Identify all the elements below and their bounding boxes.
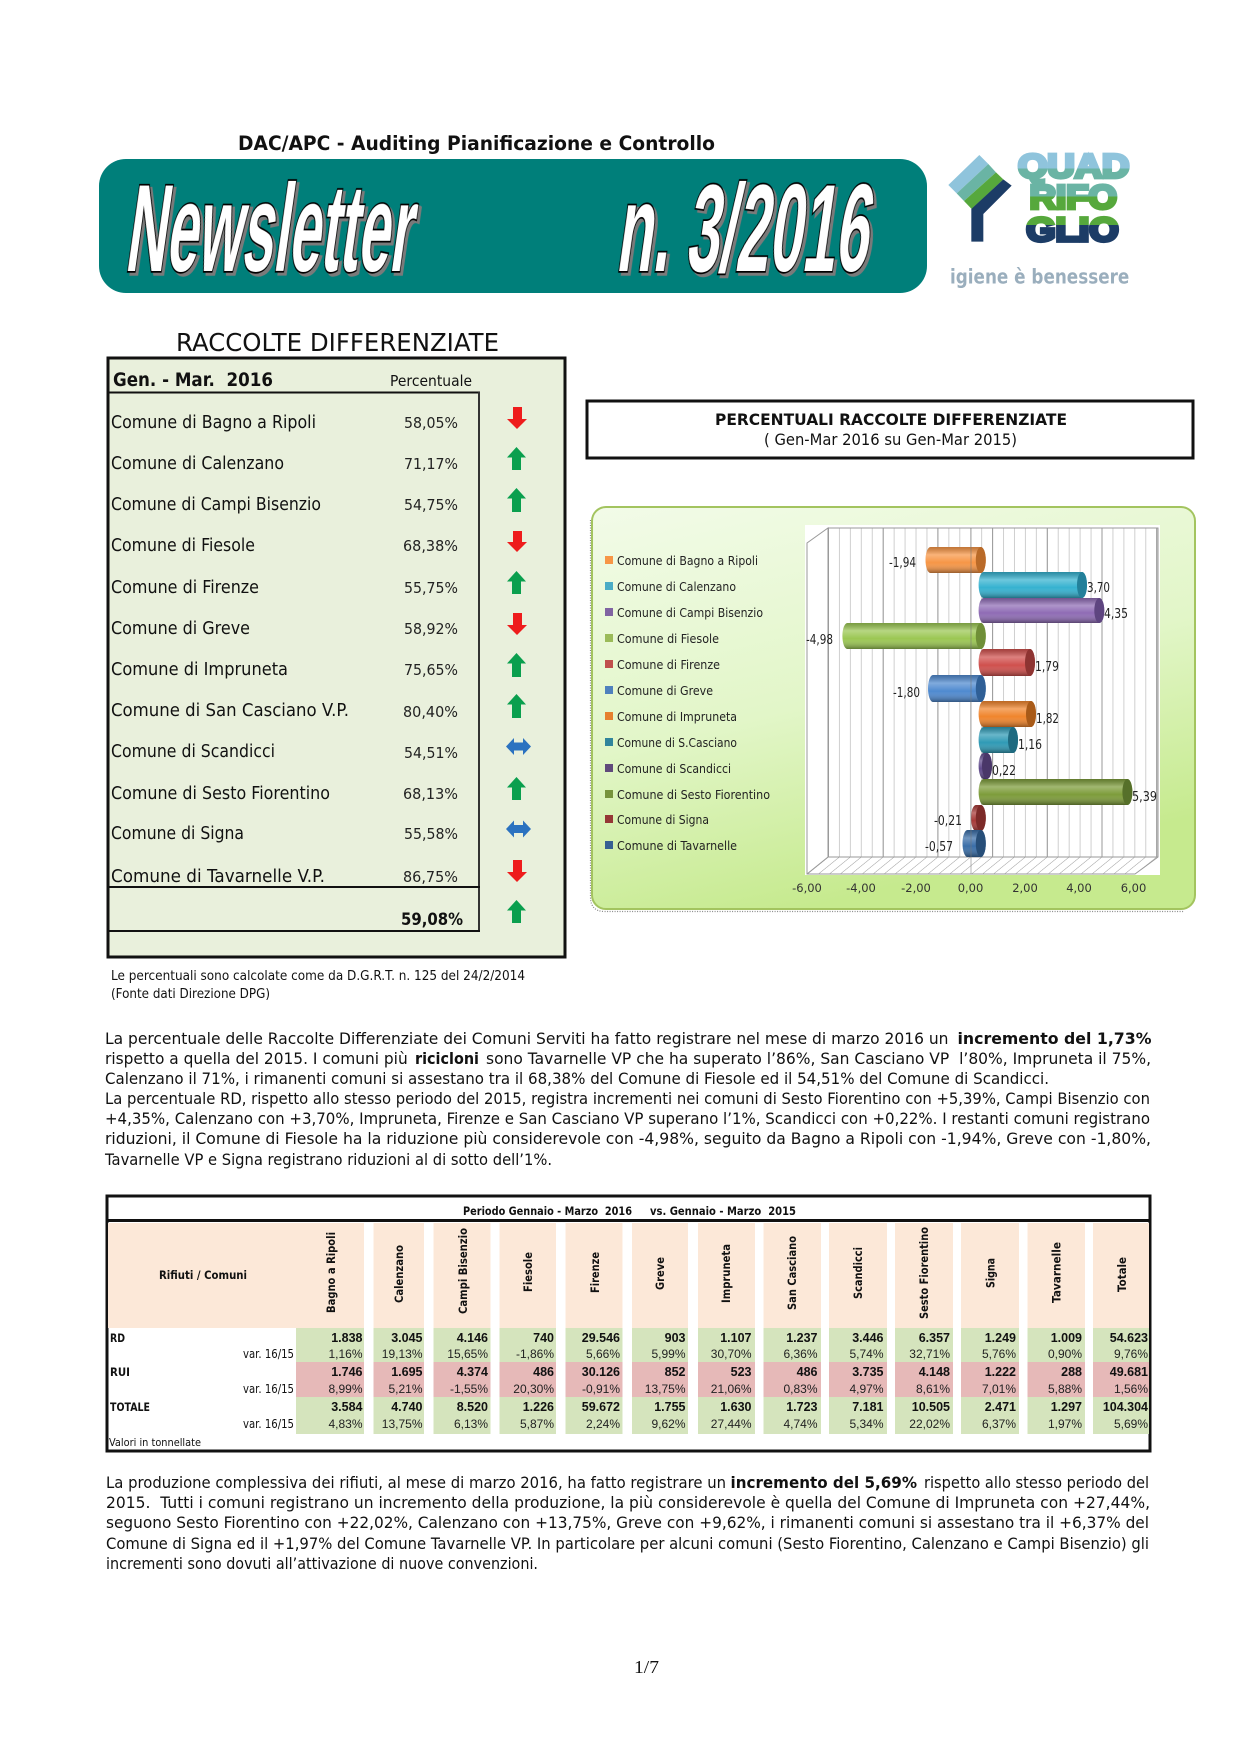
data labels: -1,80 bbox=[893, 686, 920, 701]
column values: Greve: 13,75% bbox=[645, 1382, 686, 1396]
column values: Fiesole: 1.226 bbox=[523, 1400, 554, 1414]
column values: Scandicci: 3.446 bbox=[852, 1331, 884, 1345]
rows: comuni: Comune di Bagno a Ripoli bbox=[111, 413, 316, 433]
column values: Totale: 5,69% bbox=[1114, 1417, 1148, 1431]
icon: trend arrows bbox=[506, 407, 531, 923]
legend: Comune di Calenzano bbox=[617, 580, 736, 594]
column values: Signa: 1.222 bbox=[985, 1365, 1016, 1379]
text block: waste production commentary: La produzione complessiva dei rifiuti, al mese di marzo 2016, ha fatto registrare un bbox=[106, 1473, 726, 1492]
column values: Scandicci bbox=[849, 1331, 884, 1431]
column values: Greve bbox=[645, 1331, 686, 1431]
column values: Impruneta bbox=[711, 1331, 752, 1431]
text block: raccolte differenziate commentary: La percentuale delle Raccolte Differenziate dei Comuni Serviti ha fatto registrare nel mese di marzo 2016 un bbox=[105, 1029, 948, 1048]
rows: comuni bbox=[111, 413, 349, 887]
legend: Comune di S.Casciano bbox=[617, 736, 737, 750]
footnote: (Fonte dati Direzione DPG) bbox=[111, 986, 270, 1002]
column values: Signa bbox=[982, 1331, 1016, 1431]
column values: Scandicci: 5,74% bbox=[849, 1347, 884, 1361]
column values: Bagno a Ripoli: 1,16% bbox=[328, 1347, 363, 1361]
column values: Firenze: 2,24% bbox=[586, 1417, 620, 1431]
rows: percentages bbox=[401, 414, 463, 929]
x axis labels: 4,00 bbox=[1066, 881, 1092, 895]
column values: Sesto Fiorentino bbox=[909, 1331, 950, 1431]
chart plot background bbox=[805, 525, 1160, 875]
column values: Tavarnelle: 1.297 bbox=[1051, 1400, 1082, 1414]
table header labels bbox=[159, 1227, 1129, 1319]
rows: percentages: 86,75% bbox=[403, 868, 458, 886]
legend: Comune di Bagno a Ripoli bbox=[617, 554, 758, 568]
rows: percentages: 58,05% bbox=[404, 414, 458, 432]
table header labels: Tavarnelle bbox=[1050, 1242, 1064, 1303]
rows: comuni: Comune di Tavarnelle V.P. bbox=[111, 867, 325, 887]
text block: raccolte differenziate commentary: Tavarnelle VP e Signa registrano riduzioni al di sotto dell’1%. bbox=[104, 1150, 552, 1169]
table header labels: Calenzano bbox=[392, 1245, 406, 1303]
column values: Bagno a Ripoli: 8,99% bbox=[328, 1382, 363, 1396]
table header labels: Fiesole bbox=[521, 1252, 535, 1292]
table header labels: San Casciano bbox=[785, 1236, 799, 1310]
column values: Totale: 54.623 bbox=[1110, 1331, 1148, 1345]
table header labels: Sesto Fiorentino bbox=[917, 1227, 931, 1319]
rows: percentages: 55,75% bbox=[404, 579, 458, 597]
column values: Fiesole: 486 bbox=[533, 1365, 554, 1379]
rows: percentages: 54,75% bbox=[404, 496, 458, 514]
rows: comuni: Comune di Fiesole bbox=[111, 536, 255, 556]
column values: San Casciano: 0,83% bbox=[783, 1382, 818, 1396]
column values: Fiesole: 20,30% bbox=[513, 1382, 554, 1396]
column values: Signa: 2.471 bbox=[985, 1400, 1016, 1414]
column values: Totale: 1,56% bbox=[1114, 1382, 1148, 1396]
column values: Tavarnelle bbox=[1048, 1331, 1082, 1431]
column values: Signa: 5,76% bbox=[982, 1347, 1016, 1361]
rows: comuni: Comune di Sesto Fiorentino bbox=[111, 784, 330, 804]
column values: Tavarnelle: 0,90% bbox=[1048, 1347, 1082, 1361]
table column backgrounds bbox=[108, 1223, 1149, 1434]
department heading: DAC/APC - Auditing Pianificazione e Controllo bbox=[238, 132, 715, 155]
column values: Greve: 9,62% bbox=[651, 1417, 686, 1431]
table header labels: Totale bbox=[1115, 1257, 1129, 1292]
column values: San Casciano bbox=[783, 1331, 818, 1431]
panel: percentage table by comune bbox=[107, 358, 565, 957]
column values: Sesto Fiorentino: 4.148 bbox=[919, 1365, 950, 1379]
column values: Campi Bisenzio: 4.374 bbox=[457, 1365, 488, 1379]
column values: San Casciano: 6,36% bbox=[783, 1347, 818, 1361]
column values: San Casciano: 4,74% bbox=[783, 1417, 818, 1431]
legend: Comune di Impruneta bbox=[617, 710, 737, 724]
table header labels: Scandicci bbox=[851, 1247, 865, 1299]
text block: waste production commentary bbox=[106, 1473, 1150, 1573]
legend: Comune di Greve bbox=[617, 684, 713, 698]
rows: comuni: Comune di Calenzano bbox=[111, 454, 284, 474]
data labels: 4,35 bbox=[1104, 607, 1128, 622]
table row labels: var. 16/15 bbox=[243, 1347, 294, 1361]
column values: San Casciano: 1.723 bbox=[786, 1400, 818, 1414]
data labels bbox=[806, 556, 1157, 855]
banner: newsletter title: Newsletter bbox=[120, 160, 426, 298]
column values: Sesto Fiorentino: 22,02% bbox=[909, 1417, 950, 1431]
data labels: 3,70 bbox=[1087, 581, 1110, 596]
table row labels: var. 16/15 bbox=[243, 1417, 294, 1431]
x axis labels bbox=[792, 881, 1146, 895]
text block: raccolte differenziate commentary: rispetto a quella del 2015. I comuni più bbox=[105, 1049, 408, 1068]
data labels: -4,98 bbox=[806, 633, 833, 648]
column values: Fiesole: 5,87% bbox=[520, 1417, 554, 1431]
rows: percentages: 71,17% bbox=[404, 455, 458, 473]
table header labels: Firenze bbox=[588, 1252, 602, 1293]
panel: percentage table by comune: Percentuale bbox=[390, 372, 472, 390]
legend: Comune di Fiesole bbox=[617, 632, 719, 646]
column values: Calenzano: 19,13% bbox=[382, 1347, 423, 1361]
rows: comuni: Comune di Scandicci bbox=[111, 742, 275, 762]
panel: 3D bar chart bbox=[590, 507, 1195, 912]
text block: waste production commentary: Comune di Signa ed il +1,97% del Comune Tavarnelle VP. In particolare per alcuni comuni (Sesto Fiorentino, Calenzano e Campi Bisenzio) gli bbox=[106, 1534, 1149, 1553]
rows: comuni: Comune di Firenze bbox=[111, 578, 259, 598]
legend: Comune di Firenze bbox=[617, 658, 720, 672]
rows: comuni: Comune di Signa bbox=[111, 824, 244, 844]
table header labels: Signa bbox=[984, 1258, 998, 1288]
column values: Bagno a Ripoli: 1.838 bbox=[331, 1331, 363, 1345]
column values: Firenze: 29.546 bbox=[582, 1331, 620, 1345]
chart title box: PERCENTUALI RACCOLTE DIFFERENZIATE bbox=[715, 410, 1067, 429]
column values: Campi Bisenzio bbox=[447, 1331, 488, 1431]
column values: Sesto Fiorentino: 6.357 bbox=[919, 1331, 950, 1345]
text block: waste production commentary: seguono Sesto Fiorentino con +22,02%, Calenzano con +13,75%, Greve con +9,62%, i rimanenti comuni si assestano tra il +6,37% del bbox=[106, 1513, 1149, 1532]
x axis labels: -6,00 bbox=[792, 881, 822, 895]
text block: raccolte differenziate commentary: Calenzano il 71%, i rimanenti comuni si assestano tra il 68,38% del Comune di Fiesole ed il 54,51% del Comune di Scandicci. bbox=[105, 1069, 1049, 1088]
column values: Totale: 104.304 bbox=[1103, 1400, 1148, 1414]
chart title box: ( Gen-Mar 2016 su Gen-Mar 2015) bbox=[764, 430, 1017, 449]
text block: waste production commentary: incremento del 5,69% bbox=[730, 1473, 917, 1492]
table row labels: Valori in tonnellate bbox=[109, 1436, 201, 1449]
column values: Calenzano: 1.695 bbox=[391, 1365, 423, 1379]
data labels: 1,16 bbox=[1018, 738, 1042, 753]
table row labels: RUI bbox=[110, 1365, 130, 1379]
column values: Bagno a Ripoli: 1.746 bbox=[331, 1365, 363, 1379]
rows: percentages: 75,65% bbox=[404, 661, 458, 679]
data labels: -0,21 bbox=[934, 814, 962, 829]
column values: Firenze bbox=[582, 1331, 620, 1431]
column values: Bagno a Ripoli: 3.584 bbox=[331, 1400, 363, 1414]
column values: Tavarnelle: 288 bbox=[1061, 1365, 1082, 1379]
column values: Bagno a Ripoli bbox=[328, 1331, 363, 1431]
rows: percentages: 68,38% bbox=[403, 537, 458, 555]
column values: Impruneta: 1.630 bbox=[720, 1400, 752, 1414]
x axis labels: 6,00 bbox=[1121, 881, 1146, 895]
x axis labels: 2,00 bbox=[1012, 881, 1038, 895]
text block: raccolte differenziate commentary: ricicloni bbox=[415, 1049, 479, 1068]
rows: percentages: 59,08% bbox=[401, 910, 463, 929]
chart bars bbox=[842, 547, 1132, 857]
text block: raccolte differenziate commentary: incremento del 1,73% bbox=[958, 1029, 1152, 1048]
logo: Quadrifoglio: QUAD bbox=[1018, 148, 1129, 185]
column values: Firenze: 30.126 bbox=[582, 1365, 620, 1379]
table row labels: TOTALE bbox=[110, 1400, 150, 1414]
column values: Campi Bisenzio: -1,55% bbox=[450, 1382, 488, 1396]
table header labels: Bagno a Ripoli bbox=[324, 1232, 338, 1313]
rows: percentages: 54,51% bbox=[404, 744, 458, 762]
table row labels: RD bbox=[110, 1331, 125, 1345]
column values: Calenzano: 4.740 bbox=[391, 1400, 423, 1414]
legend: Comune di Signa bbox=[617, 813, 709, 827]
x axis labels: -4,00 bbox=[846, 881, 876, 895]
column values: Calenzano: 3.045 bbox=[391, 1331, 423, 1345]
legend: Comune di Campi Bisenzio bbox=[617, 606, 763, 620]
table title bbox=[463, 1204, 796, 1218]
column values: Scandicci: 4,97% bbox=[849, 1382, 884, 1396]
table title: vs. Gennaio - Marzo 2015 bbox=[650, 1204, 796, 1218]
column values: Greve: 5,99% bbox=[651, 1347, 686, 1361]
column values: Calenzano bbox=[382, 1331, 423, 1431]
legend: Comune di Sesto Fiorentino bbox=[617, 788, 770, 802]
column values: Fiesole: -1,86% bbox=[516, 1347, 554, 1361]
column values: Signa: 1.249 bbox=[985, 1331, 1016, 1345]
column values: Tavarnelle: 1.009 bbox=[1051, 1331, 1082, 1345]
column values: Scandicci: 3.735 bbox=[852, 1365, 884, 1379]
logo: Quadrifoglio bbox=[948, 148, 1129, 289]
column values: Sesto Fiorentino: 8,61% bbox=[916, 1382, 950, 1396]
column values: Campi Bisenzio: 4.146 bbox=[457, 1331, 488, 1345]
banner: newsletter title: n. 3/2016 bbox=[611, 160, 883, 298]
table header labels: Impruneta bbox=[719, 1244, 733, 1303]
data labels: 1,79 bbox=[1035, 660, 1059, 675]
rows: comuni: Comune di Campi Bisenzio bbox=[111, 495, 321, 515]
rows: percentages: 55,58% bbox=[404, 825, 458, 843]
page number: 1/7 bbox=[634, 1657, 659, 1677]
table row labels bbox=[109, 1331, 294, 1449]
column values: Signa: 7,01% bbox=[982, 1382, 1016, 1396]
column values: Fiesole bbox=[513, 1331, 554, 1431]
table header labels: Rifiuti / Comuni bbox=[159, 1268, 247, 1282]
rows: comuni: Comune di Greve bbox=[111, 619, 250, 639]
text block: waste production commentary: rispetto allo stesso periodo del bbox=[924, 1473, 1149, 1492]
column values: Impruneta: 21,06% bbox=[711, 1382, 752, 1396]
column values: Firenze: 59.672 bbox=[582, 1400, 620, 1414]
x axis labels: -2,00 bbox=[901, 881, 931, 895]
column values: Impruneta: 27,44% bbox=[711, 1417, 752, 1431]
table row labels: var. 16/15 bbox=[243, 1382, 294, 1396]
text block: waste production commentary: incrementi sono dovuti all’attivazione di nuove convenzioni. bbox=[106, 1554, 538, 1573]
column values: Impruneta: 1.107 bbox=[720, 1331, 752, 1345]
column values: Totale: 49.681 bbox=[1110, 1365, 1148, 1379]
column values: Sesto Fiorentino: 32,71% bbox=[909, 1347, 950, 1361]
data labels: 0,22 bbox=[992, 764, 1016, 779]
text block: raccolte differenziate commentary bbox=[104, 1029, 1151, 1169]
data labels: 5,39 bbox=[1132, 790, 1157, 805]
logo: Quadrifoglio: GLIO bbox=[1026, 212, 1119, 249]
rows: percentages: 80,40% bbox=[403, 703, 458, 721]
column values: Calenzano: 5,21% bbox=[388, 1382, 423, 1396]
panel: data table bbox=[106, 1196, 1151, 1451]
column values: Campi Bisenzio: 6,13% bbox=[454, 1417, 488, 1431]
column values: Greve: 1.755 bbox=[654, 1400, 686, 1414]
text block: waste production commentary: 2015. Tutti i comuni registrano un incremento della produzione, la più considerevole è quella del Comune di Impruneta con +27,44%, bbox=[106, 1493, 1150, 1512]
data labels: 1,82 bbox=[1036, 712, 1059, 727]
chart title box bbox=[587, 401, 1193, 458]
logo: Quadrifoglio: igiene è benessere bbox=[950, 265, 1129, 289]
column values: Totale: 9,76% bbox=[1114, 1347, 1148, 1361]
column values: Scandicci: 5,34% bbox=[849, 1417, 884, 1431]
text block: raccolte differenziate commentary: +4,35%, Calenzano con +3,70%, Impruneta, Firenze e San Casciano VP superano l’1%, Scandicci con +0,22%. I restanti comuni registrano bbox=[105, 1109, 1150, 1128]
column values: Greve: 852 bbox=[665, 1365, 686, 1379]
text block: raccolte differenziate commentary: La percentuale RD, rispetto allo stesso periodo del 2015, registra incrementi nei comuni di Sesto Fiorentino con +5,39%, Campi Bisenzio con bbox=[105, 1089, 1150, 1108]
column values: Sesto Fiorentino: 10.505 bbox=[912, 1400, 950, 1414]
heading: raccolte differenziate: RACCOLTE DIFFERENZIATE bbox=[176, 328, 499, 357]
column values: San Casciano: 486 bbox=[797, 1365, 818, 1379]
column values: Tavarnelle: 1,97% bbox=[1048, 1417, 1082, 1431]
column values: San Casciano: 1.237 bbox=[786, 1331, 818, 1345]
legend bbox=[605, 554, 770, 853]
table header labels: Greve bbox=[653, 1257, 667, 1290]
data labels: -1,94 bbox=[889, 556, 916, 571]
table header: Gen. - Mar. 2016 bbox=[113, 369, 273, 391]
data labels: -0,57 bbox=[925, 840, 953, 855]
legend: Comune di Scandicci bbox=[617, 762, 731, 776]
x axis labels: 0,00 bbox=[958, 881, 983, 895]
column values: Campi Bisenzio: 15,65% bbox=[447, 1347, 488, 1361]
column values: Impruneta: 523 bbox=[731, 1365, 752, 1379]
column values: Totale bbox=[1103, 1331, 1148, 1431]
column values: Greve: 903 bbox=[665, 1331, 686, 1345]
column values: Campi Bisenzio: 8.520 bbox=[457, 1400, 488, 1414]
table title: Periodo Gennaio - Marzo 2016 bbox=[463, 1204, 632, 1218]
column values: Scandicci: 7.181 bbox=[852, 1400, 884, 1414]
column values: Impruneta: 30,70% bbox=[711, 1347, 752, 1361]
text block: raccolte differenziate commentary: riduzioni, il Comune di Fiesole ha la riduzione più considerevole con -4,98%, seguito da Bagno a Ripoli con -1,94%, Greve con -1,80%, bbox=[105, 1129, 1151, 1148]
footnote: Le percentuali sono calcolate come da D.G.R.T. n. 125 del 24/2/2014 bbox=[111, 968, 525, 984]
column values: Signa: 6,37% bbox=[982, 1417, 1016, 1431]
column values: Calenzano: 13,75% bbox=[382, 1417, 423, 1431]
legend: Comune di Tavarnelle bbox=[617, 839, 737, 853]
column values: Firenze: 5,66% bbox=[586, 1347, 620, 1361]
rows: comuni: Comune di Impruneta bbox=[111, 660, 288, 680]
rows: percentages: 58,92% bbox=[404, 620, 458, 638]
footnote bbox=[111, 968, 525, 1002]
rows: comuni: Comune di San Casciano V.P. bbox=[111, 701, 349, 721]
column values: Fiesole: 740 bbox=[533, 1331, 554, 1345]
table header labels: Campi Bisenzio bbox=[456, 1228, 470, 1314]
column values: Bagno a Ripoli: 4,83% bbox=[328, 1417, 363, 1431]
column values: Tavarnelle: 5,88% bbox=[1048, 1382, 1082, 1396]
logo: Quadrifoglio: RIFO bbox=[1030, 179, 1117, 216]
text block: raccolte differenziate commentary: sono Tavarnelle VP che ha superato l’86%, San Casciano VP l’80%, Impruneta il 75%, bbox=[486, 1049, 1151, 1068]
column values: Firenze: -0,91% bbox=[582, 1382, 620, 1396]
rows: percentages: 68,13% bbox=[403, 785, 458, 803]
